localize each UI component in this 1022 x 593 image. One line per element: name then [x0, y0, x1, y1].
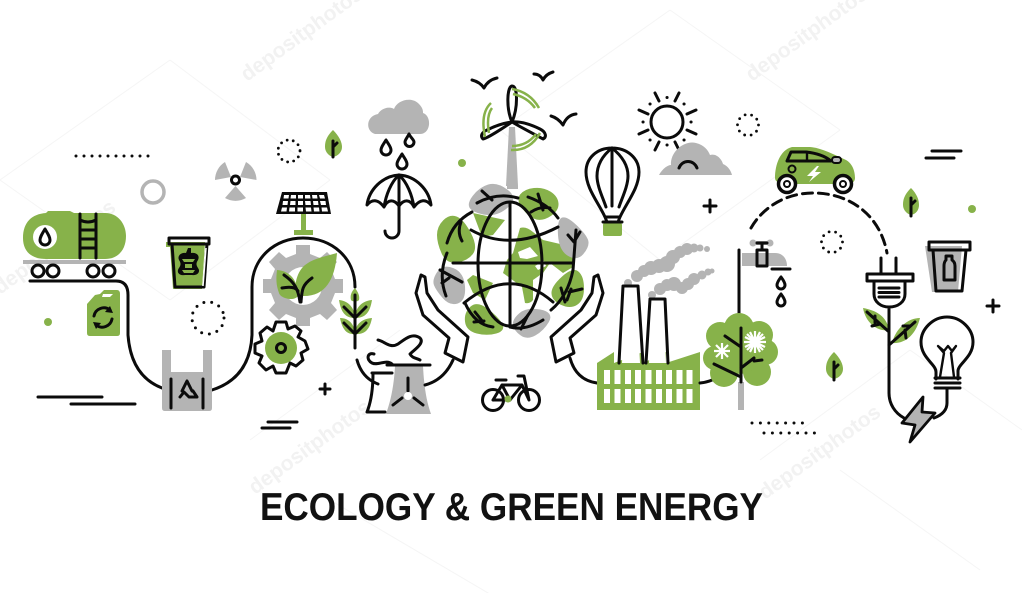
icon: lightning bolt	[902, 397, 935, 442]
icon: sprout	[339, 288, 372, 348]
icon: small leaf	[325, 130, 342, 157]
icon: water tap	[742, 240, 790, 306]
icon: bicycle	[482, 376, 540, 410]
dotted circle	[278, 140, 300, 162]
icon: big gear with leaves	[263, 245, 343, 326]
icon: wind turbine	[482, 86, 545, 189]
icon: light bulb	[921, 317, 973, 418]
icon: flowering tree	[703, 250, 778, 410]
plus	[704, 200, 716, 212]
continents	[467, 213, 573, 303]
leaves around the globe	[434, 185, 588, 337]
icon: birds	[472, 72, 576, 125]
dotted circle	[822, 232, 842, 252]
icon: waste cup with apple core	[166, 238, 209, 289]
icon: leaf	[903, 188, 919, 216]
dashed arc to plug	[751, 193, 887, 253]
grid	[478, 202, 542, 326]
icon: fuel tanker	[23, 211, 126, 277]
icon: solar panel	[276, 192, 331, 235]
icon: gray ring	[142, 181, 164, 203]
icon: radiation sign	[215, 162, 256, 201]
icon: cooling towers	[367, 336, 431, 414]
icon: jerry can	[87, 290, 120, 336]
title: ECOLOGY & GREEN ENERGY	[260, 486, 763, 529]
green dot	[458, 159, 466, 167]
dotted circle	[738, 114, 758, 136]
dotted lines	[752, 423, 818, 433]
icon: plug with leaves stem	[863, 258, 920, 418]
green dot	[44, 318, 52, 326]
icon: factory with smoke	[597, 243, 714, 410]
plus	[987, 300, 999, 312]
plus	[320, 384, 330, 394]
icon: gray cloud	[659, 143, 732, 175]
icon: leaf	[826, 352, 843, 380]
lines	[262, 422, 297, 428]
watermark: depositphotos	[244, 395, 375, 499]
connecting line: left route	[30, 238, 378, 390]
icon: small gear	[255, 322, 308, 373]
watermark: depositphotos	[754, 400, 885, 504]
icon: hot air balloon	[586, 148, 639, 236]
connecting line: factory to tree	[700, 377, 718, 383]
branches	[440, 191, 582, 329]
icon: plastic bag	[162, 350, 212, 411]
icon: hands holding globe	[416, 275, 603, 385]
dotted circle	[192, 302, 224, 334]
icon: rain cloud	[368, 100, 429, 169]
icon: sun	[639, 93, 696, 150]
icon: umbrella	[367, 175, 431, 238]
icon: globe with leaves	[434, 185, 588, 337]
green dot	[968, 205, 976, 213]
icon: waste cup with bottle	[925, 242, 970, 292]
lines	[38, 397, 135, 404]
lines	[926, 151, 961, 158]
dotted line	[76, 154, 155, 158]
icon: electric car	[775, 147, 855, 192]
